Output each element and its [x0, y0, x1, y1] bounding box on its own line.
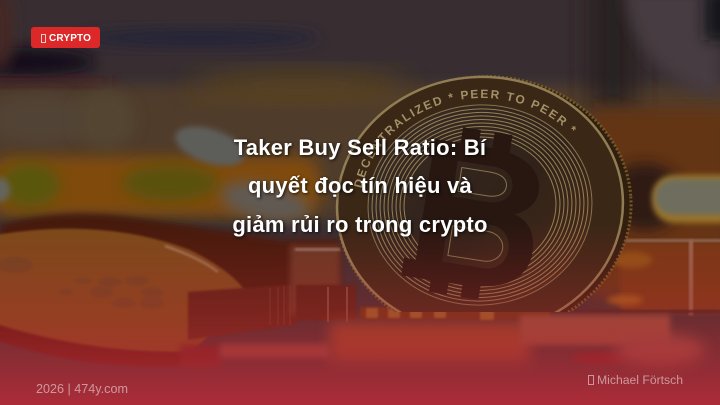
category tag: CRYPTO [49, 33, 91, 44]
circuit board pieces [180, 245, 720, 367]
coin face [368, 104, 592, 306]
coin rim [336, 76, 624, 312]
bitcoin symbol [402, 128, 539, 300]
title: quyết đọc tín hiệu và [248, 173, 472, 198]
rim lettering: DECENTRALIZED * PEER TO PEER * [354, 90, 576, 188]
title: Taker Buy Sell Ratio: Bí [234, 134, 486, 160]
coin edge [374, 80, 630, 312]
title [232, 134, 489, 240]
author: Michael Förtsch [597, 373, 683, 387]
title: giảm rủi ro trong crypto [232, 212, 488, 237]
category tag [31, 27, 100, 48]
left foreground coin [0, 229, 296, 366]
circuit rings [372, 108, 588, 302]
source and year: 2026 | 474y.com [36, 382, 128, 396]
main bitcoin coin [336, 75, 632, 312]
